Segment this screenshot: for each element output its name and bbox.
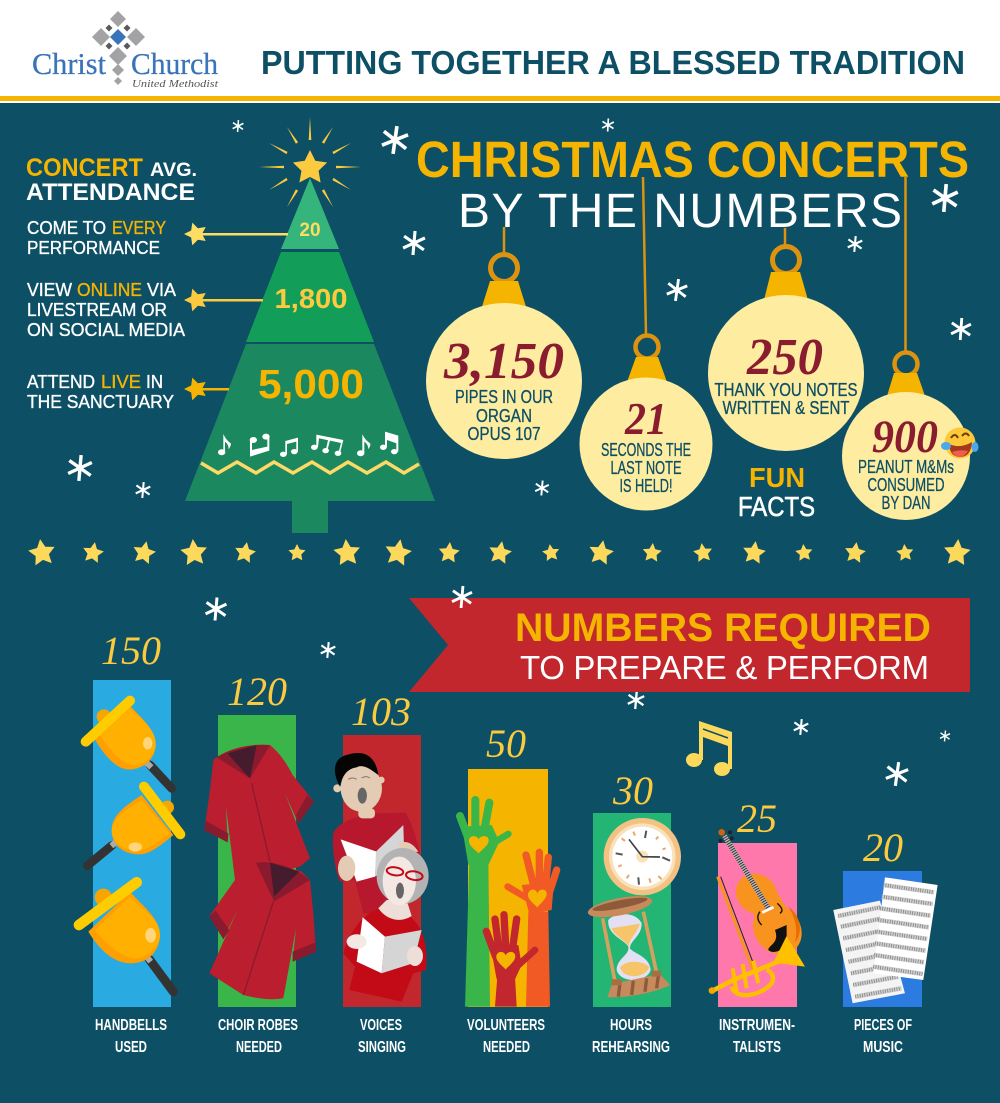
attendance heading: ATTENDANCE (26, 179, 195, 206)
attendance label: every performance: COME TO (27, 218, 106, 238)
bar: voices 103 (333, 689, 429, 1056)
bar: pieces of music 20: MUSIC (863, 1039, 903, 1056)
icon: raised hands (460, 800, 557, 1007)
bar: volunteers 50: VOLUNTEERS (467, 1017, 545, 1034)
attendance label: live: THE SANCTUARY (27, 392, 174, 412)
ornament: 900 peanut M&Ms: PEANUT M&Ms (858, 457, 954, 477)
ornament: 21 seconds: 21 (624, 393, 667, 444)
attendance label: every performance (27, 218, 166, 258)
attendance label: online: VIEW (27, 280, 72, 300)
bar: instrumentalists 25: TALISTS (733, 1039, 781, 1056)
icon: violin and trumpet (709, 829, 812, 995)
icon: handbells (79, 701, 180, 992)
bar: choir robes 120: NEEDED (236, 1039, 282, 1056)
tier: 5,000 (185, 344, 435, 501)
ornament: 3,150 pipes: PIPES IN OUR (455, 387, 553, 407)
christmas tree chart: 5,000 (258, 361, 364, 407)
pointer: 20 (181, 219, 288, 247)
attendance label: live: ATTEND (27, 372, 95, 392)
bar: handbells 150: HANDBELLS (95, 1017, 167, 1034)
bar: choir robes 120: 120 (227, 669, 287, 714)
icon: laughing emoji (941, 428, 978, 458)
fun facts: FUN (749, 462, 805, 493)
bar: hours 30: HOURS (610, 1017, 652, 1034)
pointer: 1,800 (181, 285, 263, 313)
banner: numbers required: TO PREPARE & PERFORM (520, 649, 929, 686)
attendance heading: CONCERT (26, 154, 143, 182)
icon: clock and hourglass (586, 818, 681, 997)
attendance label: every performance: EVERY (112, 218, 166, 238)
attendance label: online: LIVESTREAM OR (27, 300, 167, 320)
bar: handbells 150 (79, 628, 180, 1056)
attendance label: online: VIA (147, 280, 176, 300)
icon: sheet music (833, 877, 938, 1003)
bar: voices 103: 103 (351, 689, 411, 734)
ornament: 250 thank you notes: WRITTEN & SENT (722, 398, 850, 418)
attendance label: live: LIVE (101, 372, 141, 392)
christmas tree chart: 1,800 (274, 283, 348, 314)
attendance label: online (27, 280, 185, 340)
icon: music note (686, 721, 732, 776)
bar: volunteers 50: 50 (486, 721, 526, 766)
ornament: 900 peanut M&Ms: BY DAN (882, 493, 930, 513)
tree trunk (292, 500, 328, 533)
bar: voices 103: VOICES (360, 1017, 402, 1034)
ornament: 3,150 pipes: 3,150 (443, 333, 564, 390)
logo: Christ Church United Methodist: Church (131, 46, 218, 81)
tree top star (293, 150, 327, 183)
banner: numbers required: NUMBERS REQUIRED (515, 606, 931, 650)
bar: choir robes 120 (204, 669, 316, 1056)
ornament: 21 seconds: SECONDS THE (601, 440, 691, 460)
values: 20 (299, 220, 321, 241)
ornament: 250 thank you notes: 250 (746, 329, 823, 386)
header band (0, 0, 1000, 103)
star divider (27, 537, 971, 566)
bar: choir robes 120: CHOIR ROBES (218, 1017, 298, 1034)
tree rays (259, 117, 361, 207)
ornament: 250 thank you notes (708, 228, 864, 451)
ornament: 900 peanut M&Ms (842, 177, 978, 520)
logo: Christ Church United Methodist: Christ (32, 46, 106, 81)
attendance heading: AVG. (150, 160, 197, 181)
attendance label: live (27, 372, 174, 412)
ornament: 21 seconds: IS HELD! (620, 476, 672, 496)
bar: handbells 150: USED (115, 1039, 147, 1056)
bar: instrumentalists 25 (709, 796, 812, 1056)
logo: Christ Church United Methodist: United Methodist (132, 78, 219, 90)
bar: handbells 150: 150 (101, 628, 161, 673)
ornament: 250 thank you notes: THANK YOU NOTES (714, 380, 858, 400)
bar: hours 30: REHEARSING (592, 1039, 670, 1056)
snowflake on banner (452, 585, 472, 609)
tier: 1,800 (246, 252, 374, 342)
ornament: 900 peanut M&Ms: CONSUMED (868, 475, 944, 495)
bar: volunteers 50 (460, 721, 557, 1056)
bar: pieces of music 20: 20 (863, 825, 903, 870)
pointer: 5,000 (181, 374, 229, 402)
christmas tree chart (185, 117, 435, 533)
attendance heading (26, 154, 197, 206)
ornament: 3,150 pipes: OPUS 107 (468, 424, 540, 444)
bar: hours 30: 30 (612, 768, 653, 813)
bar: hours 30 (586, 768, 681, 1056)
icon: singers (333, 753, 429, 1002)
snowflakes (68, 118, 971, 787)
ornament: 21 seconds: LAST NOTE (610, 458, 682, 478)
title: PUTTING TOGETHER A BLESSED TRADITION (261, 44, 965, 81)
bar: voices 103: SINGING (358, 1039, 406, 1056)
fun facts: FACTS (738, 491, 815, 522)
bar: instrumentalists 25: 25 (737, 796, 777, 841)
icon: choir robes (204, 745, 316, 999)
ornament: 3,150 pipes (426, 227, 582, 459)
zigzag garland (201, 462, 419, 473)
banner: numbers required (409, 598, 970, 692)
bar: pieces of music 20: PIECES OF (854, 1017, 912, 1034)
fun facts (738, 462, 815, 522)
bar: volunteers 50: NEEDED (483, 1039, 530, 1056)
heading: by the numbers: BY THE NUMBERS (458, 185, 902, 238)
bar: instrumentalists 25: INSTRUMEN- (719, 1017, 795, 1034)
attendance label: live: IN (146, 372, 163, 392)
attendance label: online: ONLINE (77, 280, 142, 300)
ornament: 3,150 pipes: ORGAN (476, 406, 532, 426)
ornament: 900 peanut M&Ms: 900 (872, 411, 938, 463)
music notes (218, 432, 398, 457)
logo: Christ Church United Methodist (32, 11, 219, 90)
tier: 20 (281, 178, 339, 249)
attendance label: every performance: PERFORMANCE (27, 238, 160, 258)
bar: pieces of music 20 (833, 825, 938, 1056)
attendance label: online: ON SOCIAL MEDIA (27, 320, 185, 340)
ornament: 21 seconds (580, 177, 712, 510)
